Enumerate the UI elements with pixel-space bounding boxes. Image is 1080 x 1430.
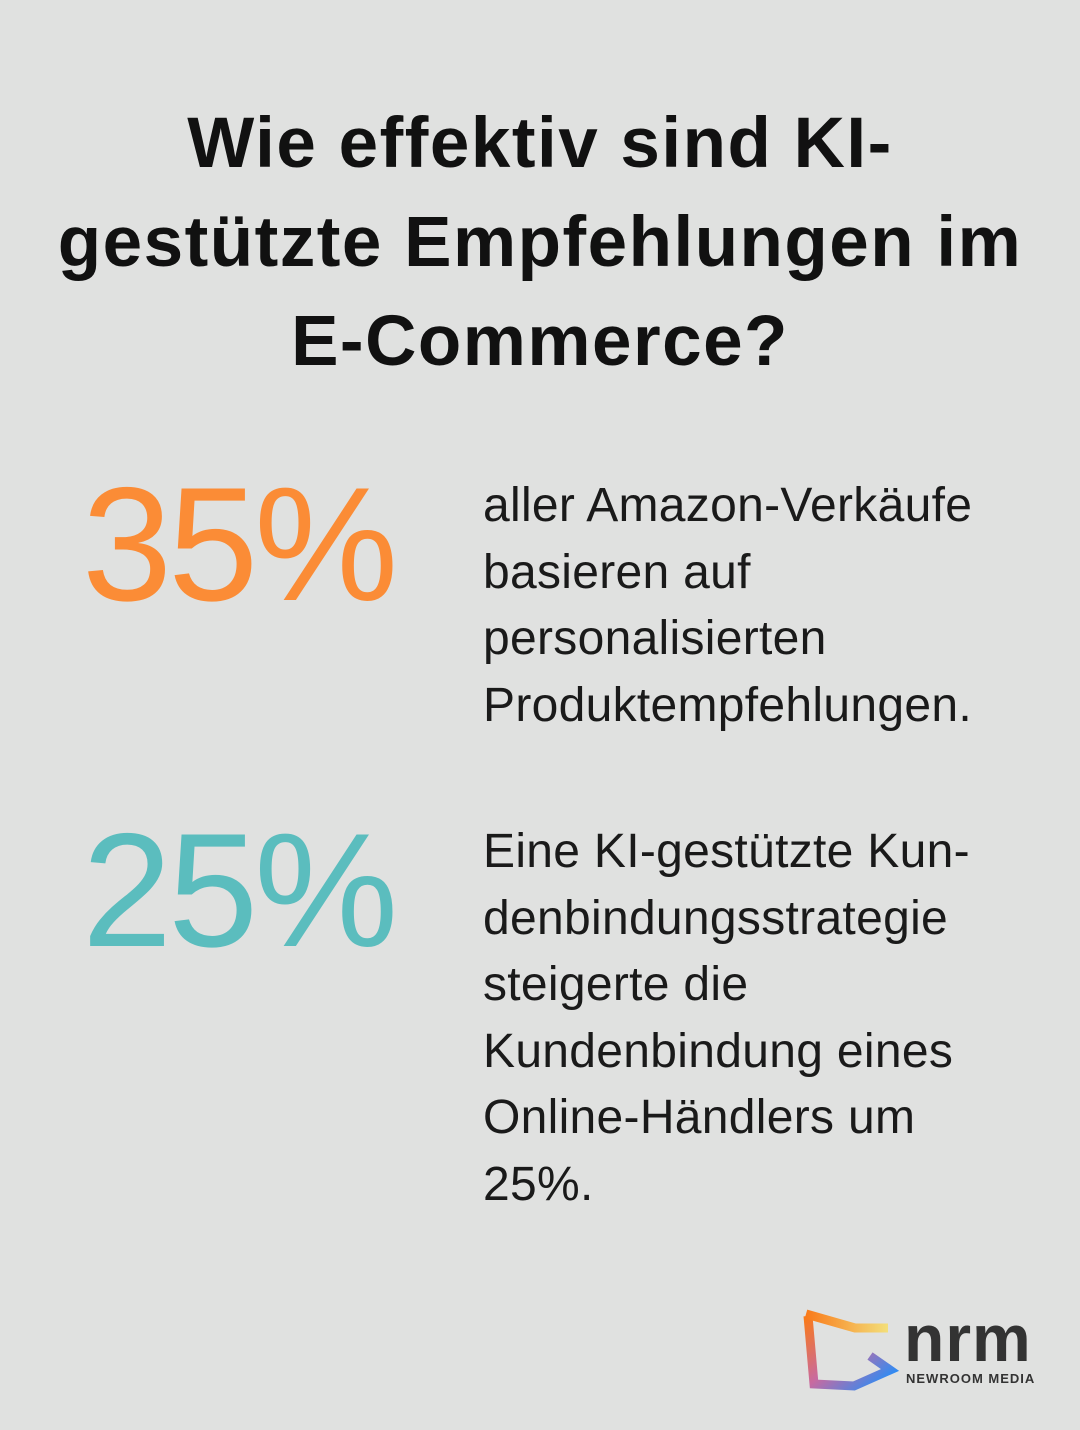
title	[58, 104, 1022, 381]
stat text: Amazon: Produktempfehlungen.	[483, 678, 972, 732]
stat text: Kundenbindung: denbindungsstrategie	[483, 892, 948, 944]
stat text: Kundenbindung: 25%.	[483, 1158, 594, 1210]
stat text: Kundenbindung: Eine KI-gestützte Kun-	[483, 825, 970, 878]
stat text: Kundenbindung: steigerte die	[483, 958, 748, 1011]
stat text: Kundenbindung: Online-Händlers um	[483, 1091, 915, 1144]
icon: logo mark	[804, 1310, 899, 1390]
stat text: Amazon: aller Amazon-Verkäufe	[483, 479, 972, 532]
stat number: 25%: 25%	[82, 800, 394, 981]
stat number: 35%: 35%	[82, 454, 394, 635]
title: gestützte Empfehlungen im	[58, 203, 1022, 282]
title: E-Commerce?	[291, 302, 789, 381]
stat text: Kundenbindung	[483, 825, 970, 1210]
title: Wie effektiv sind KI-	[187, 104, 893, 183]
stat text: Kundenbindung: Kundenbindung eines	[483, 1024, 953, 1078]
logo: newroom media	[804, 1301, 1035, 1390]
stat text: Amazon: personalisierten	[483, 612, 827, 665]
stat text: Amazon: basieren auf	[483, 546, 751, 598]
stat text: Amazon	[483, 479, 972, 732]
logo: newroom media: NEWROOM MEDIA	[906, 1371, 1035, 1386]
logo text: nrm	[904, 1301, 1032, 1375]
